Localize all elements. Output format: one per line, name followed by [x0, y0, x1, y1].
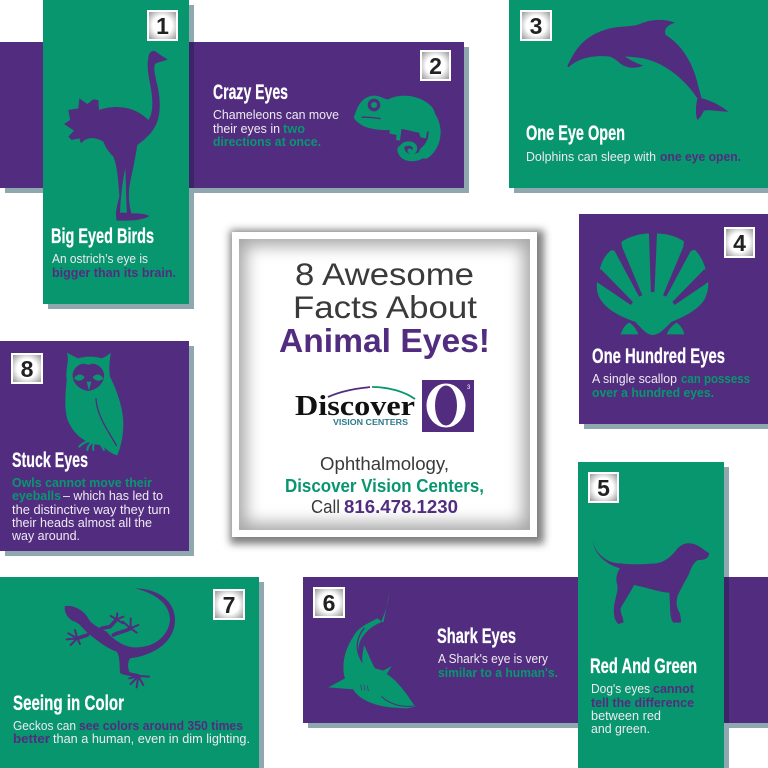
title: Facts About [293, 289, 477, 325]
number badge 6: 6 [323, 590, 335, 616]
panel 5: red and green [578, 462, 729, 768]
number badge 8 [11, 353, 43, 384]
text: owl fact: way around. [11, 529, 80, 543]
panel: center title card [230, 230, 544, 544]
number badge 5 [588, 472, 619, 503]
number badge 7 [213, 589, 245, 620]
number badge 8: 8 [21, 356, 34, 382]
panel 8: stuck eyes [0, 341, 194, 556]
text: shark fact: A Shark's eye is very [438, 652, 549, 666]
icon: dog [592, 540, 709, 624]
number badge 1: 1 [156, 13, 169, 39]
text: dog fact: cannot [653, 682, 695, 696]
text: owl fact: their heads almost all the [12, 516, 152, 530]
text: dog fact [591, 682, 695, 736]
heading: crazy eyes: Crazy Eyes [213, 81, 288, 104]
contact text [285, 453, 484, 517]
text: chameleon fact: Chameleons can move [213, 108, 339, 122]
logo: O3 square [422, 380, 474, 432]
text: gecko fact: Geckos can [13, 719, 76, 733]
text: gecko fact: better [13, 732, 50, 746]
text: dog fact: between red [591, 709, 661, 723]
icon: ostrich [64, 51, 168, 221]
text: owl fact: Owls cannot move their [12, 476, 152, 490]
number badge 2 [420, 50, 451, 81]
text: ostrich fact: An ostrich’s eye is [52, 252, 148, 266]
number badge 4: 4 [733, 230, 746, 256]
contact text: Discover Vision Centers, [285, 475, 484, 496]
text: dog fact: tell the difference [591, 696, 694, 710]
number badge 2: 2 [429, 53, 442, 79]
text: scallop fact: A single scallop [592, 372, 677, 386]
text: dolphin fact: Dolphins can sleep with [526, 150, 656, 164]
text: dolphin fact: one eye open. [660, 150, 741, 164]
contact text: Call [311, 496, 340, 517]
text: scallop fact [592, 372, 750, 400]
text: dog fact: and green. [591, 722, 650, 736]
contact text: Ophthalmology, [320, 453, 449, 474]
panel 6: shark eyes [303, 577, 768, 728]
text: gecko fact: than a human, even in dim lighting. [53, 732, 250, 746]
number badge 1 [147, 10, 178, 41]
icon: dolphin [567, 20, 728, 120]
logo: discover vision centers: VISION CENTERS [333, 418, 409, 427]
text: owl fact [11, 476, 170, 543]
contact text: 816.478.1230 [344, 496, 458, 517]
logo: O3 square: 3 [467, 385, 471, 391]
text: chameleon fact: directions at once. [213, 135, 321, 149]
text: scallop fact: can possess [681, 372, 750, 386]
heading: one eye open: One Eye Open [526, 122, 625, 145]
title: Animal Eyes! [279, 322, 490, 359]
text: gecko fact [13, 719, 250, 746]
heading: red and green: Red And Green [590, 655, 697, 678]
icon: scallop shell [592, 230, 714, 335]
text: owl fact: – which has led to [63, 489, 163, 503]
heading: stuck eyes: Stuck Eyes [12, 449, 88, 472]
text: chameleon fact: their eyes in [213, 122, 280, 136]
text: owl fact: eyeballs [12, 489, 61, 503]
panel 1: big eyed birds [43, 0, 194, 309]
number badge 7: 7 [223, 592, 235, 618]
panel 7: seeing in color [0, 577, 264, 768]
heading: shark eyes: Shark Eyes [437, 625, 516, 648]
text: shark fact [438, 652, 558, 680]
text: chameleon fact: two [283, 122, 305, 136]
icon: gecko [65, 588, 175, 687]
heading: seeing in color: Seeing in Color [13, 692, 124, 715]
text: scallop fact: over a hundred eyes. [592, 386, 714, 400]
panel 4: one hundred eyes [579, 214, 768, 429]
text: gecko fact: see colors around 350 times [79, 719, 243, 733]
text: ostrich fact [52, 252, 176, 280]
icon: owl [65, 353, 123, 455]
text: owl fact: the distinctive way they turn [12, 503, 170, 517]
logo: discover vision centers: Discover [295, 390, 415, 422]
panel 3: one eye open [509, 0, 768, 193]
heading: big eyed birds: Big Eyed Birds [51, 225, 154, 248]
title [279, 256, 490, 359]
text: dog fact: Dog's eyes [591, 682, 650, 696]
title: 8 Awesome [295, 256, 474, 292]
panel 2: crazy eyes [0, 42, 469, 193]
icon: shark [328, 593, 415, 708]
text: ostrich fact: bigger than its brain. [52, 266, 176, 280]
number badge 5: 5 [597, 475, 610, 501]
icon: chameleon [354, 96, 435, 158]
number badge 6 [313, 587, 345, 618]
number badge 4 [724, 227, 755, 258]
number badge 3: 3 [530, 13, 542, 39]
number badge 3 [520, 10, 552, 41]
text: shark fact: similar to a human's. [438, 666, 558, 680]
text: chameleon fact [213, 108, 339, 149]
text: dolphin fact [526, 150, 741, 164]
